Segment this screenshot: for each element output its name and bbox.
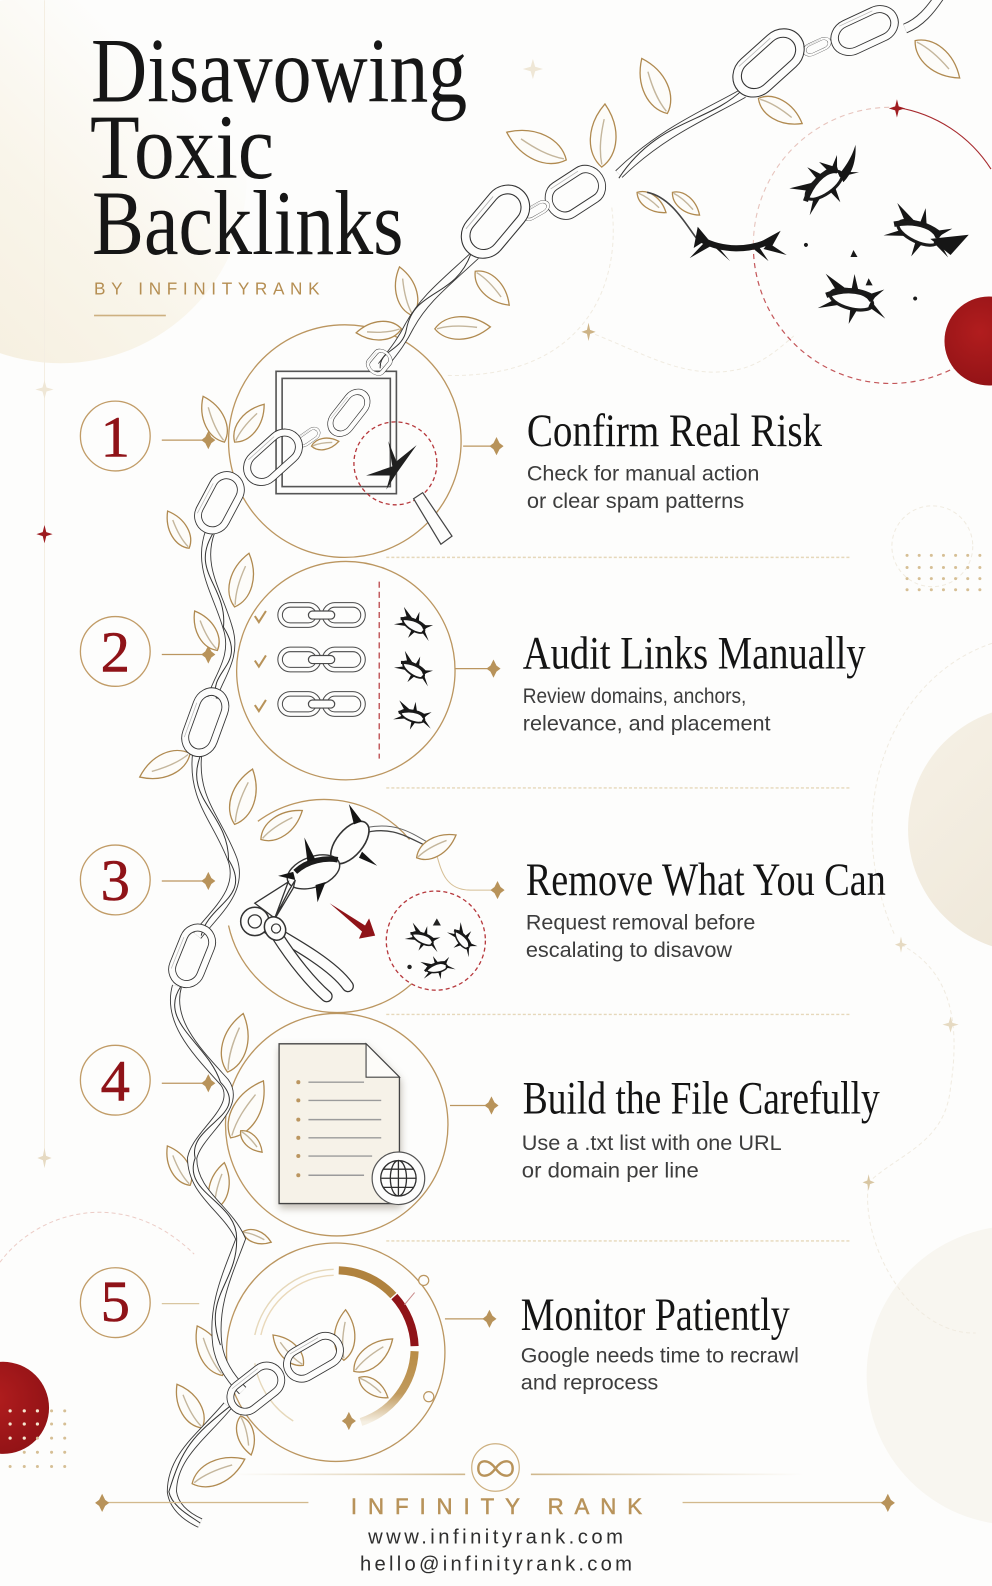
footer brand: INFINITY RANK: [351, 1494, 642, 1519]
leaves along the vine: [135, 32, 967, 1494]
step 1 connector left: [162, 431, 215, 449]
step 1 icon: frame: [276, 371, 396, 494]
step 5 connector left: [162, 1303, 199, 1305]
red circle: top right: [944, 296, 992, 385]
step 2 body: Review domains, anchors,: [523, 685, 746, 708]
step 3 arrow: [330, 903, 375, 939]
step 4 connector left: [162, 1074, 215, 1092]
step 2 connector right: [455, 660, 501, 678]
step 4 body: Use a .txt list with one URL: [522, 1132, 782, 1155]
byline rule: [94, 315, 166, 316]
step 5 icon: progress ring: [255, 1269, 434, 1430]
step 1 circle: [229, 325, 461, 557]
step 3 connector right: [436, 852, 505, 899]
dot grid: bottom left: [8, 1409, 66, 1468]
step 5 number: 5: [101, 1269, 130, 1334]
title: Toxic: [90, 96, 274, 198]
step 3 number: 3: [101, 848, 130, 913]
step 4 body: or domain per line: [522, 1159, 699, 1182]
step 4 circle: [226, 1013, 448, 1236]
step 2 connector left: [162, 645, 215, 664]
step 3 body: [526, 912, 755, 962]
step 1 number: [80, 401, 150, 471]
step 3 icon: pliers: [241, 880, 348, 996]
icon: red star left: [36, 525, 53, 543]
step 5 heading: Monitor Patiently: [521, 1290, 790, 1341]
step 4 heading: Build the File Carefully: [523, 1074, 880, 1125]
footer contact: [360, 1526, 632, 1576]
decorative cream blob: top left: [0, 0, 247, 363]
icon: red star top right: [889, 99, 905, 118]
step 3 heading: Remove What You Can: [526, 855, 886, 906]
step 2 icon: toxic links: [391, 603, 439, 736]
step 3 icon: barbed wire being cut: [278, 804, 437, 902]
footer rules: [95, 1474, 895, 1512]
step 2 heading: Audit Links Manually: [523, 629, 866, 680]
step 5 number: [80, 1268, 150, 1338]
step 4 icon: disavow document: [279, 1044, 399, 1204]
step 1 connector right: [463, 437, 504, 455]
step 1 body: [527, 463, 759, 513]
chain links: [168, 4, 899, 1418]
step 1 number: 1: [101, 404, 130, 469]
step 3 connector left: [162, 872, 215, 890]
step 5 connector right: [445, 1310, 497, 1328]
footer contact: hello@infinityrank.com: [360, 1554, 632, 1576]
title: Disavowing: [91, 19, 467, 121]
step 2 body: [523, 685, 771, 735]
step 3 body: escalating to disavow: [526, 939, 733, 962]
step 5 body: Google needs time to recrawl: [521, 1344, 799, 1367]
step 1 body: or clear spam patterns: [527, 490, 744, 513]
step 2 icon: good links with checks: [255, 605, 363, 714]
step 5 body: and reprocess: [521, 1372, 658, 1395]
red circle: bottom left: [0, 1362, 49, 1454]
step 5 body: [521, 1344, 799, 1395]
footer infinity badge: [472, 1444, 519, 1491]
step 1 heading: Confirm Real Risk: [527, 406, 823, 457]
step 2 body: relevance, and placement: [523, 712, 771, 735]
step 2 circle: [237, 561, 455, 780]
byline: BY INFINITYRANK: [94, 278, 320, 298]
step 3 circle: [229, 799, 415, 1013]
dot grid: right: [906, 554, 981, 591]
step 4 number: 4: [101, 1048, 130, 1113]
title: [90, 19, 467, 274]
step 5 circle: [227, 1243, 445, 1461]
step 3 body: Request removal before: [526, 912, 755, 935]
step 4 body: [522, 1132, 782, 1182]
step 2 icon: dashed divider: [378, 582, 380, 759]
title: Backlinks: [92, 172, 403, 274]
step 2 number: [80, 617, 150, 686]
vine rope: [169, 0, 940, 1523]
step 1 body: Check for manual action: [527, 463, 759, 486]
step 4 connector right: [450, 1096, 499, 1115]
footer contact: www.infinityrank.com: [367, 1526, 623, 1548]
decorative pale circle: lower right: [867, 1226, 992, 1525]
step 3 number: [80, 845, 150, 915]
decorative cream circle: right: [908, 706, 992, 953]
broken toxic wire: top right: [647, 192, 787, 261]
dashed red circle: top right: [753, 107, 991, 383]
step 1 icon: magnifier with thorn: [354, 422, 452, 544]
step 4 number: [80, 1045, 150, 1115]
step 3 icon: removed fragments: [386, 891, 485, 990]
toxic link fragments: top right: [785, 145, 969, 333]
step 4 icon: globe: [372, 1152, 425, 1205]
step 2 number: 2: [101, 620, 130, 685]
